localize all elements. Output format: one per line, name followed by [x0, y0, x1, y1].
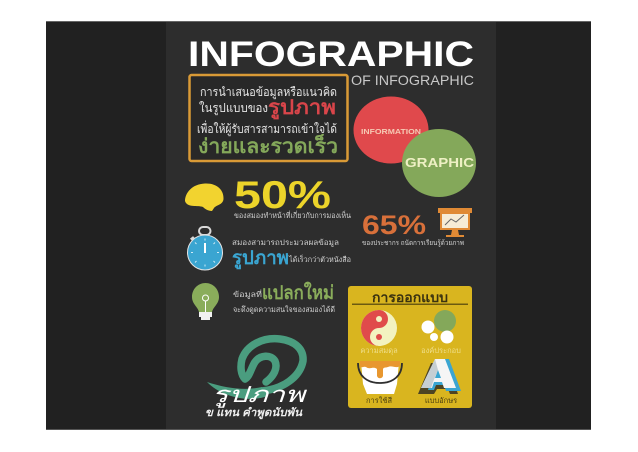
definition line 2: ในรูปแบบของ — [199, 101, 268, 116]
text: brain processing: สมองสามารถประมวลผลข้อมูล — [232, 238, 339, 247]
panel: design — [348, 286, 472, 408]
label: balance: ความสมดุล — [360, 346, 398, 355]
icon: composition circles — [422, 310, 456, 344]
highlighted word: picture: รูปภาพ — [268, 97, 336, 121]
diagram: information circle — [354, 96, 428, 164]
logo tagline: ข แทน คำพูดนับพัน — [205, 406, 302, 420]
label: graphic: GRAPHIC — [405, 155, 475, 170]
stat: 50 percent: 50% — [234, 174, 331, 217]
stat: 65 percent: 65% — [362, 210, 426, 240]
title: INFOGRAPHIC — [188, 35, 474, 74]
icon: stopwatch — [188, 227, 222, 270]
logo: green spiral — [207, 339, 303, 399]
icon: letter A — [418, 359, 461, 394]
label: composition: องค์ประกอบ — [421, 346, 461, 355]
highlighted word: picture blue: รูปภาพ — [232, 248, 289, 270]
text: faster than text: ได้เร็วกว่าตัวหนังสือ — [288, 254, 351, 264]
caption: 65 percent: ของประชากร ถนัดการเรียนรู้ด้วยภาพ — [362, 239, 464, 247]
panel: definition box — [190, 75, 348, 161]
subtitle: OF INFOGRAPHIC — [351, 72, 474, 88]
icon: paint bucket — [358, 361, 402, 394]
diagram: graphic circle — [402, 129, 476, 197]
panel heading: การออกแบบ — [372, 290, 448, 305]
caption: 50 percent: ของสมองทำหน้าที่เกี่ยวกับการมองเห็น — [234, 210, 351, 220]
definition line 3: เพื่อให้ผู้รับสารสามารถเข้าใจได้ — [197, 120, 337, 137]
label: typeface: แบบอักษร — [425, 396, 457, 405]
slide background — [46, 21, 591, 430]
icon: brain — [185, 183, 224, 211]
icon: presentation board — [438, 208, 472, 237]
icon: light bulb — [192, 283, 219, 320]
label: color use: การใช้สี — [366, 396, 392, 405]
logo text: picture handwritten: รูปภาพ — [212, 382, 308, 408]
text: attracts brain attention: จะดึงดูดความสนใจของสมองได้ดี — [233, 305, 335, 314]
text: new information: ข้อมูลที่ — [233, 289, 262, 299]
highlighted phrase: easy and fast: ง่ายและรวดเร็ว — [198, 133, 338, 158]
definition line 1: การนำเสนอข้อมูลหรือแนวคิด — [200, 85, 337, 100]
icon: yin yang — [361, 310, 397, 346]
label: information: INFORMATION — [361, 127, 421, 136]
highlighted word: new and strange: แปลกใหม่ — [262, 281, 334, 304]
